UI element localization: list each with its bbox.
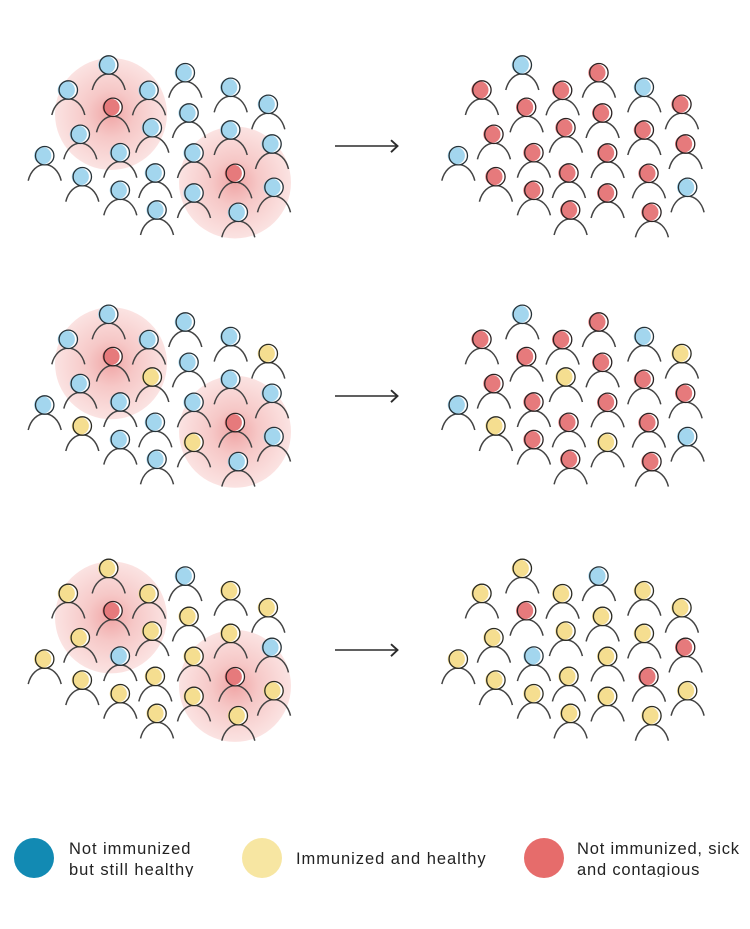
person xyxy=(549,118,582,153)
person xyxy=(64,628,97,663)
person xyxy=(172,353,206,387)
person xyxy=(665,344,698,379)
person xyxy=(136,622,169,656)
person xyxy=(258,178,290,212)
legend label: not immunized, sick and contagious xyxy=(577,840,740,877)
person xyxy=(665,598,698,633)
panel: high immunity, before outbreak spreads xyxy=(28,559,291,742)
person xyxy=(669,135,702,169)
person xyxy=(552,413,585,447)
person: immunized xyxy=(178,433,210,467)
person xyxy=(214,327,247,362)
person xyxy=(632,413,665,448)
person xyxy=(139,413,172,447)
person: sick xyxy=(96,602,130,636)
person xyxy=(506,559,539,593)
legend label: not immunized but still healthy xyxy=(69,840,194,877)
person xyxy=(591,687,624,721)
person xyxy=(442,650,475,684)
person xyxy=(506,56,539,90)
person xyxy=(28,650,61,684)
person xyxy=(256,384,288,418)
person xyxy=(256,135,288,169)
halo: infection zone right xyxy=(179,376,291,488)
person xyxy=(591,144,624,178)
person xyxy=(591,433,624,467)
person xyxy=(222,203,255,237)
person xyxy=(140,450,174,484)
person: sick xyxy=(219,164,252,198)
person xyxy=(479,168,512,202)
person xyxy=(510,347,543,382)
person xyxy=(172,104,206,138)
person xyxy=(28,146,61,181)
legend swatch: red xyxy=(524,838,564,878)
person xyxy=(169,313,202,347)
person xyxy=(632,668,665,702)
person xyxy=(628,370,661,404)
person xyxy=(586,607,619,641)
person xyxy=(442,146,475,181)
person xyxy=(479,417,512,451)
person xyxy=(442,396,475,430)
arrow: row 3 xyxy=(335,644,398,656)
person xyxy=(104,144,137,178)
person xyxy=(628,121,661,155)
person xyxy=(178,647,210,681)
panel: some immunity, before outbreak spreads xyxy=(28,305,291,488)
person: not immunized xyxy=(169,567,202,601)
halo: infection zone left xyxy=(55,58,167,170)
panel: low immunity, before outbreak spreads xyxy=(28,56,291,238)
person xyxy=(169,63,202,98)
person xyxy=(591,393,624,427)
halo: infection zone right xyxy=(179,630,291,742)
person xyxy=(506,305,539,339)
person xyxy=(136,118,169,153)
person xyxy=(517,647,550,681)
person xyxy=(92,56,125,90)
person: sick xyxy=(96,98,130,132)
person xyxy=(669,384,702,418)
person xyxy=(591,647,624,681)
person xyxy=(546,81,579,115)
person xyxy=(66,671,99,705)
person xyxy=(591,184,624,218)
legend label: not immunized, sick and contagious: Not immunized, sick xyxy=(577,840,740,858)
person xyxy=(669,638,702,672)
legend label: immunized and healthy: Immunized and healthy xyxy=(296,850,487,868)
legend swatch: yellow xyxy=(242,838,282,878)
person xyxy=(132,330,166,365)
person xyxy=(92,305,125,339)
person xyxy=(28,396,61,430)
person xyxy=(214,78,247,112)
person xyxy=(517,181,550,215)
legend xyxy=(14,838,740,878)
person: not immunized xyxy=(256,638,288,672)
person xyxy=(517,144,550,178)
person: sick xyxy=(219,668,252,702)
person xyxy=(222,452,255,487)
person xyxy=(214,370,247,404)
person xyxy=(222,706,255,741)
person xyxy=(139,667,172,701)
person xyxy=(104,181,137,215)
person xyxy=(214,624,247,658)
person xyxy=(52,330,85,364)
person xyxy=(628,582,661,616)
person xyxy=(510,602,543,636)
person xyxy=(635,706,668,741)
person xyxy=(252,598,285,633)
person xyxy=(628,327,661,362)
person xyxy=(546,584,579,619)
person xyxy=(517,430,550,465)
person xyxy=(52,81,85,115)
person xyxy=(586,353,619,387)
person xyxy=(64,125,97,159)
arrow: row 2 xyxy=(335,390,398,402)
person xyxy=(552,667,585,701)
person: sick xyxy=(219,413,252,448)
arrow: row 1 xyxy=(335,140,398,152)
halo: infection zone right xyxy=(179,126,291,238)
person xyxy=(554,201,587,235)
person xyxy=(510,98,543,132)
person xyxy=(104,684,137,719)
person xyxy=(517,393,550,427)
person xyxy=(546,330,579,365)
halo: infection zone left xyxy=(55,561,167,673)
halo: infection zone left xyxy=(55,307,167,419)
person: not immunized xyxy=(104,647,137,681)
person xyxy=(104,393,137,427)
person xyxy=(258,682,290,716)
person xyxy=(671,178,704,212)
person xyxy=(477,374,510,409)
person xyxy=(64,374,97,409)
person xyxy=(258,427,290,462)
person xyxy=(132,81,166,115)
person xyxy=(635,203,668,237)
person: immunized xyxy=(136,368,169,402)
person xyxy=(671,682,704,716)
person xyxy=(140,201,174,235)
panel: high immunity, after outbreak spreads xyxy=(442,559,704,741)
person xyxy=(628,624,661,658)
panel: low immunity, after outbreak spreads xyxy=(442,56,704,237)
person xyxy=(214,121,247,155)
person xyxy=(671,427,704,462)
person xyxy=(628,78,661,112)
person xyxy=(66,168,99,202)
person: immunized xyxy=(252,344,285,379)
person xyxy=(139,164,172,198)
person xyxy=(52,584,85,618)
person xyxy=(552,164,585,198)
person xyxy=(517,684,550,719)
person xyxy=(465,584,498,618)
person xyxy=(635,452,668,487)
person xyxy=(178,393,210,427)
person xyxy=(178,687,210,721)
person xyxy=(554,450,587,484)
person xyxy=(172,607,206,641)
panel: some immunity, after outbreak spreads xyxy=(442,305,704,487)
person xyxy=(465,330,498,364)
person xyxy=(549,622,582,656)
person xyxy=(477,628,510,663)
person xyxy=(92,559,125,593)
legend label: not immunized but still healthy: Not immunized xyxy=(69,840,191,858)
person xyxy=(479,671,512,705)
person xyxy=(632,164,665,198)
person xyxy=(582,313,615,347)
person xyxy=(104,430,137,465)
person xyxy=(665,95,698,129)
person xyxy=(214,582,247,616)
person xyxy=(582,567,615,601)
person xyxy=(554,704,587,738)
person: immunized xyxy=(66,417,99,451)
person xyxy=(549,368,582,402)
person xyxy=(582,63,615,98)
person xyxy=(465,81,498,115)
person xyxy=(140,704,174,738)
legend swatch: blue xyxy=(14,838,54,878)
person xyxy=(477,125,510,159)
person xyxy=(178,144,210,178)
person xyxy=(178,184,210,218)
person xyxy=(132,584,166,619)
person: sick xyxy=(96,347,130,382)
person xyxy=(252,95,285,129)
person xyxy=(586,104,619,138)
